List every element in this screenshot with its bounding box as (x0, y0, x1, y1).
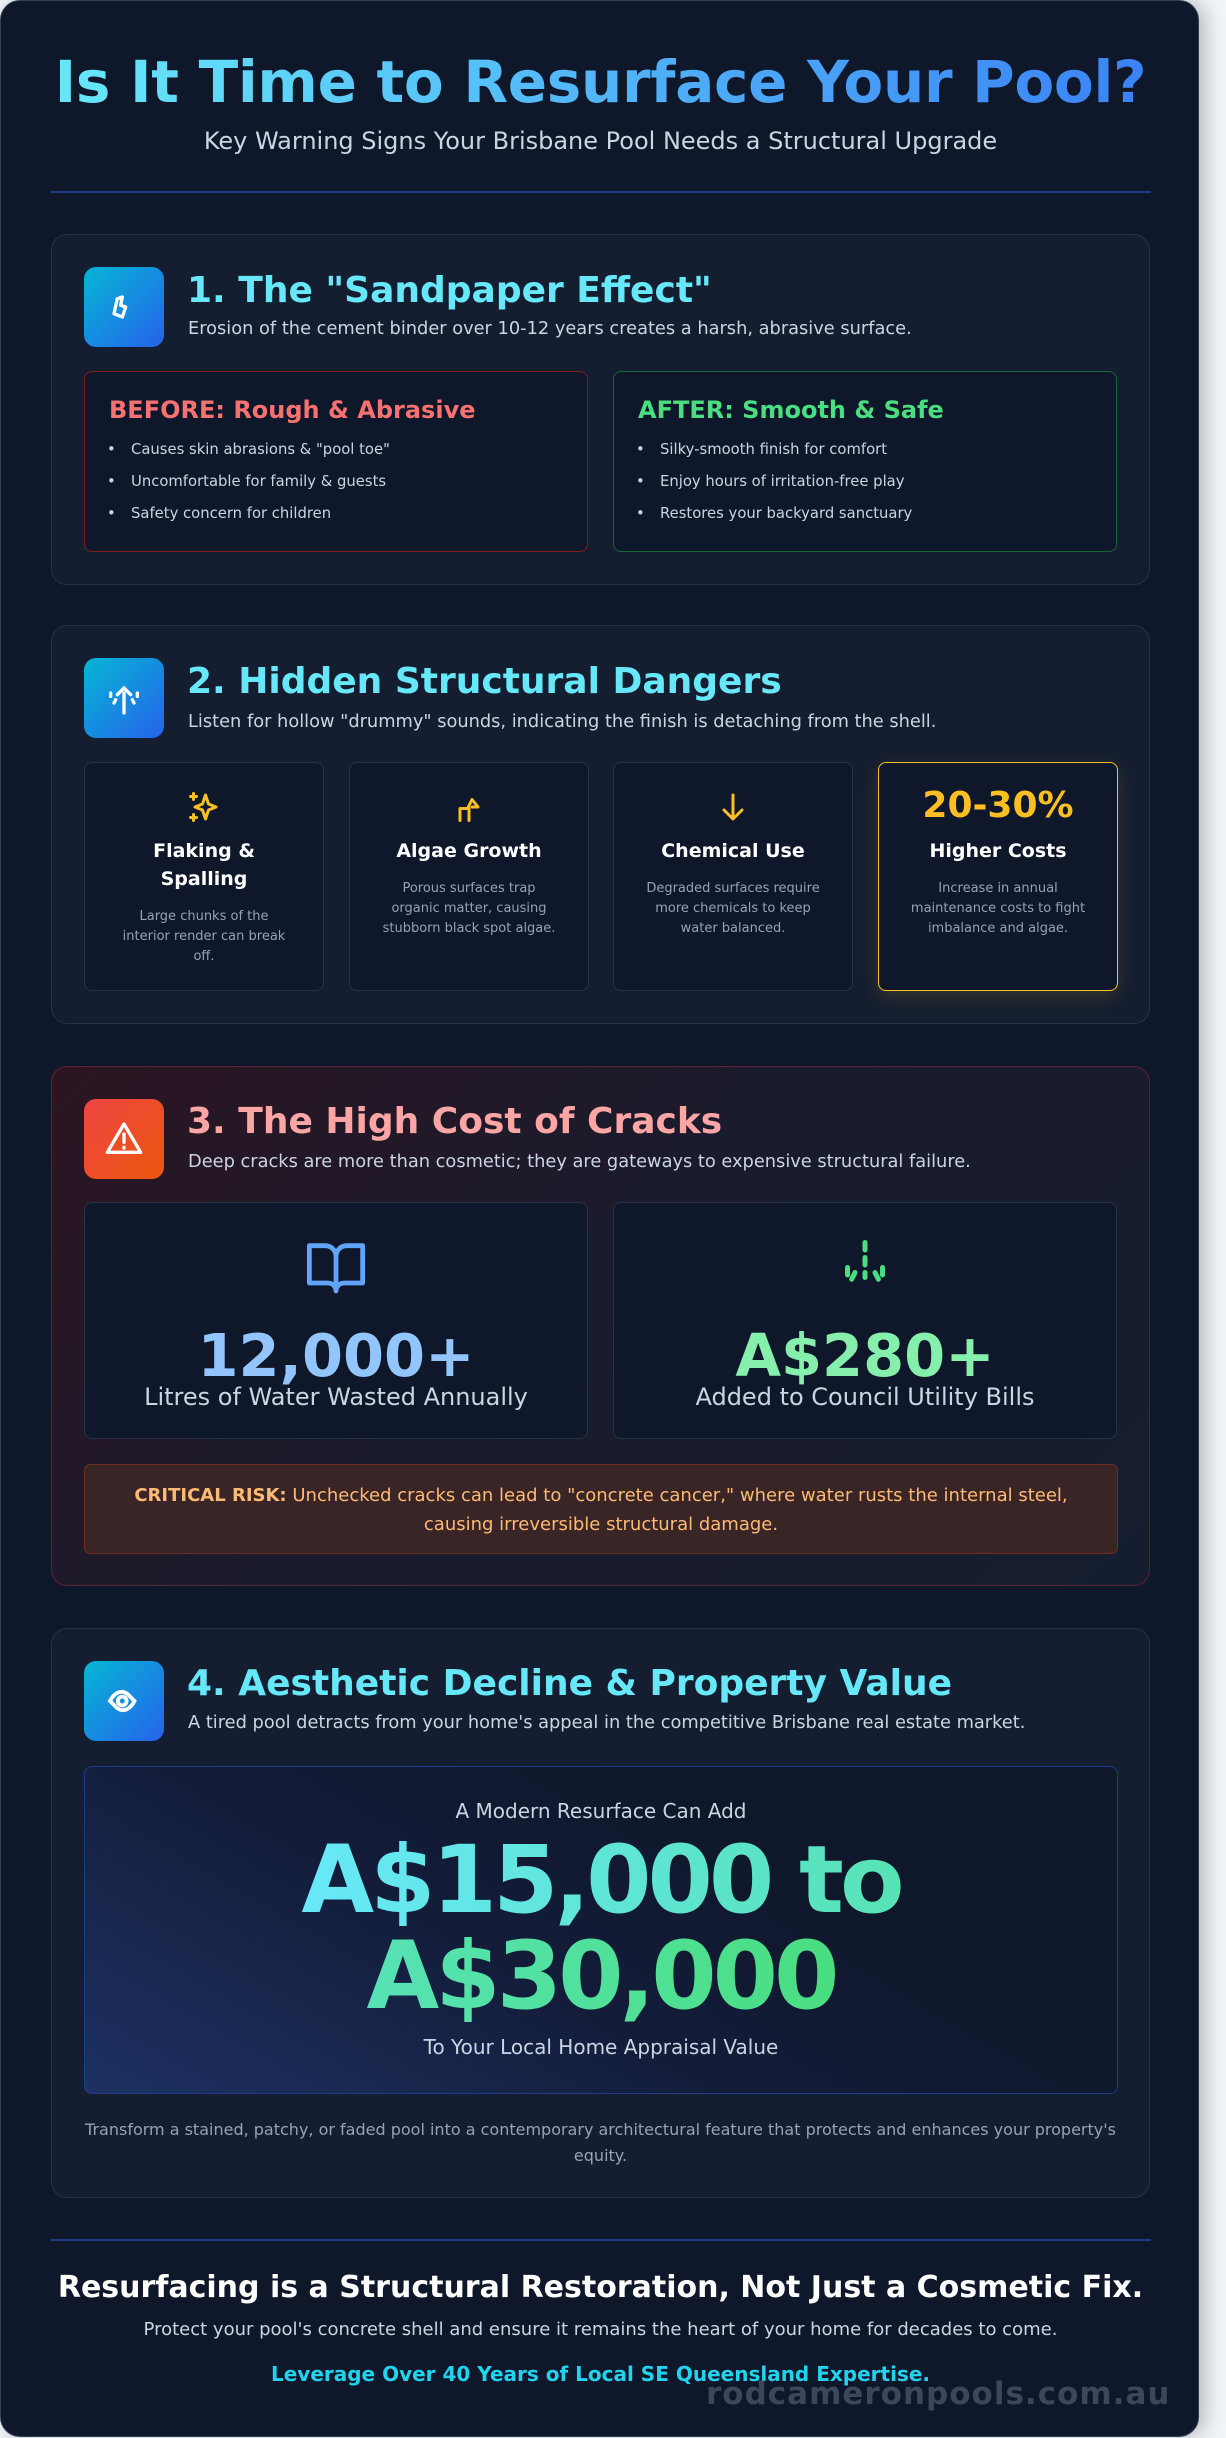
heading: 3. The High Cost of Cracks (187, 1101, 722, 1142)
heading: 4. Aesthetic Decline & Property Value (187, 1663, 952, 1704)
after box: Silky-smooth finish for comfort (660, 441, 887, 458)
description: Deep cracks are more than cosmetic; they are gateways to expensive structural failure. (188, 1151, 971, 1172)
after box (613, 371, 1117, 552)
icon: warning (84, 1099, 164, 1179)
value callout: A Modern Resurface Can Add (456, 1799, 746, 1823)
callout: critical risk: CRITICAL RISK: Unchecked cracks can lead to "concrete cancer," where water rusts the internal steel, (134, 1485, 1068, 1506)
value callout: A$30,000 (367, 1922, 835, 2031)
subtitle: Key Warning Signs Your Brisbane Pool Needs a Structural Upgrade (204, 127, 997, 155)
icon: sound (84, 658, 164, 738)
panel: cost of cracks (51, 1066, 1150, 1586)
card: higher costs (878, 762, 1118, 991)
card: flaking: Flaking & (153, 840, 255, 862)
stat: water: 12,000+ (197, 1321, 475, 1390)
card: chemical: Degraded surfaces require more chemicals to keep water balanced. (646, 881, 820, 936)
card: algae: Porous surfaces trap organic matter, causing stubborn black spot algae. (383, 881, 555, 936)
icon: book (306, 1243, 366, 1294)
stat: water: Litres of Water Wasted Annually (144, 1383, 528, 1411)
description: Erosion of the cement binder over 10-12 years creates a harsh, abrasive surface. (188, 318, 912, 339)
stat: water (84, 1202, 588, 1439)
before box: Causes skin abrasions & "pool toe" (131, 441, 390, 458)
stat: bills: A$280+ (735, 1321, 995, 1390)
before box (84, 371, 588, 552)
value callout: To Your Local Home Appraisal Value (424, 2035, 778, 2059)
conclusion heading: Resurfacing is a Structural Restoration, Not Just a Cosmetic Fix. (58, 2270, 1143, 2305)
panel: hidden structural dangers (51, 625, 1150, 1024)
stat: bills: Added to Council Utility Bills (695, 1383, 1035, 1411)
title: Is It Time to Resurface Your Pool? (55, 48, 1146, 116)
watermark: rodcameronpools.com.au (706, 2376, 1170, 2412)
card: higher costs: Increase in annual maintenance costs to fight imbalance and algae. (911, 881, 1085, 936)
description: Listen for hollow "drummy" sounds, indicating the finish is detaching from the shell. (188, 711, 936, 732)
panel: sandpaper effect (51, 234, 1150, 585)
after box: Enjoy hours of irritation-free play (660, 473, 905, 490)
panel: aesthetic decline (51, 1628, 1150, 2198)
icon: drip (845, 1240, 885, 1282)
description: A tired pool detracts from your home's appeal in the competitive Brisbane real estate market. (188, 1712, 1025, 1733)
before box: BEFORE: Rough & Abrasive (109, 396, 476, 424)
heading: 2. Hidden Structural Dangers (187, 661, 782, 702)
value callout (84, 1766, 1118, 2094)
card: algae: Algae Growth (396, 840, 542, 862)
card: chemical (613, 762, 853, 991)
footnote: Transform a stained, patchy, or faded pool into a contemporary architectural feature that protects and enhances your property's equity. (85, 2120, 1116, 2165)
before box: Safety concern for children (131, 505, 331, 522)
card: higher costs: 20-30% (922, 785, 1074, 826)
value callout: A$15,000 to (301, 1826, 901, 1935)
card: chemical: Chemical Use (661, 840, 805, 862)
card: algae (349, 762, 589, 991)
stat: bills (613, 1202, 1117, 1439)
heading: 1. The "Sandpaper Effect" (187, 270, 712, 311)
icon: hand (84, 267, 164, 347)
callout: critical risk (84, 1464, 1118, 1554)
card: higher costs: Higher Costs (929, 840, 1067, 862)
before box: Uncomfortable for family & guests (131, 473, 386, 490)
after box: AFTER: Smooth & Safe (638, 396, 944, 424)
card: flaking: Large chunks of the interior render can break off. (123, 909, 285, 964)
conclusion text: Protect your pool's concrete shell and ensure it remains the heart of your home for decades to come. (144, 2319, 1057, 2340)
icon: eye (84, 1661, 164, 1741)
expertise line: Leverage Over 40 Years of Local SE Queensland Expertise. (271, 2362, 930, 2386)
callout: critical risk: causing irreversible structural damage. (424, 1514, 778, 1535)
after box: Restores your backyard sanctuary (660, 505, 912, 522)
card: flaking: Spalling (161, 868, 247, 890)
card: flaking (84, 762, 324, 991)
